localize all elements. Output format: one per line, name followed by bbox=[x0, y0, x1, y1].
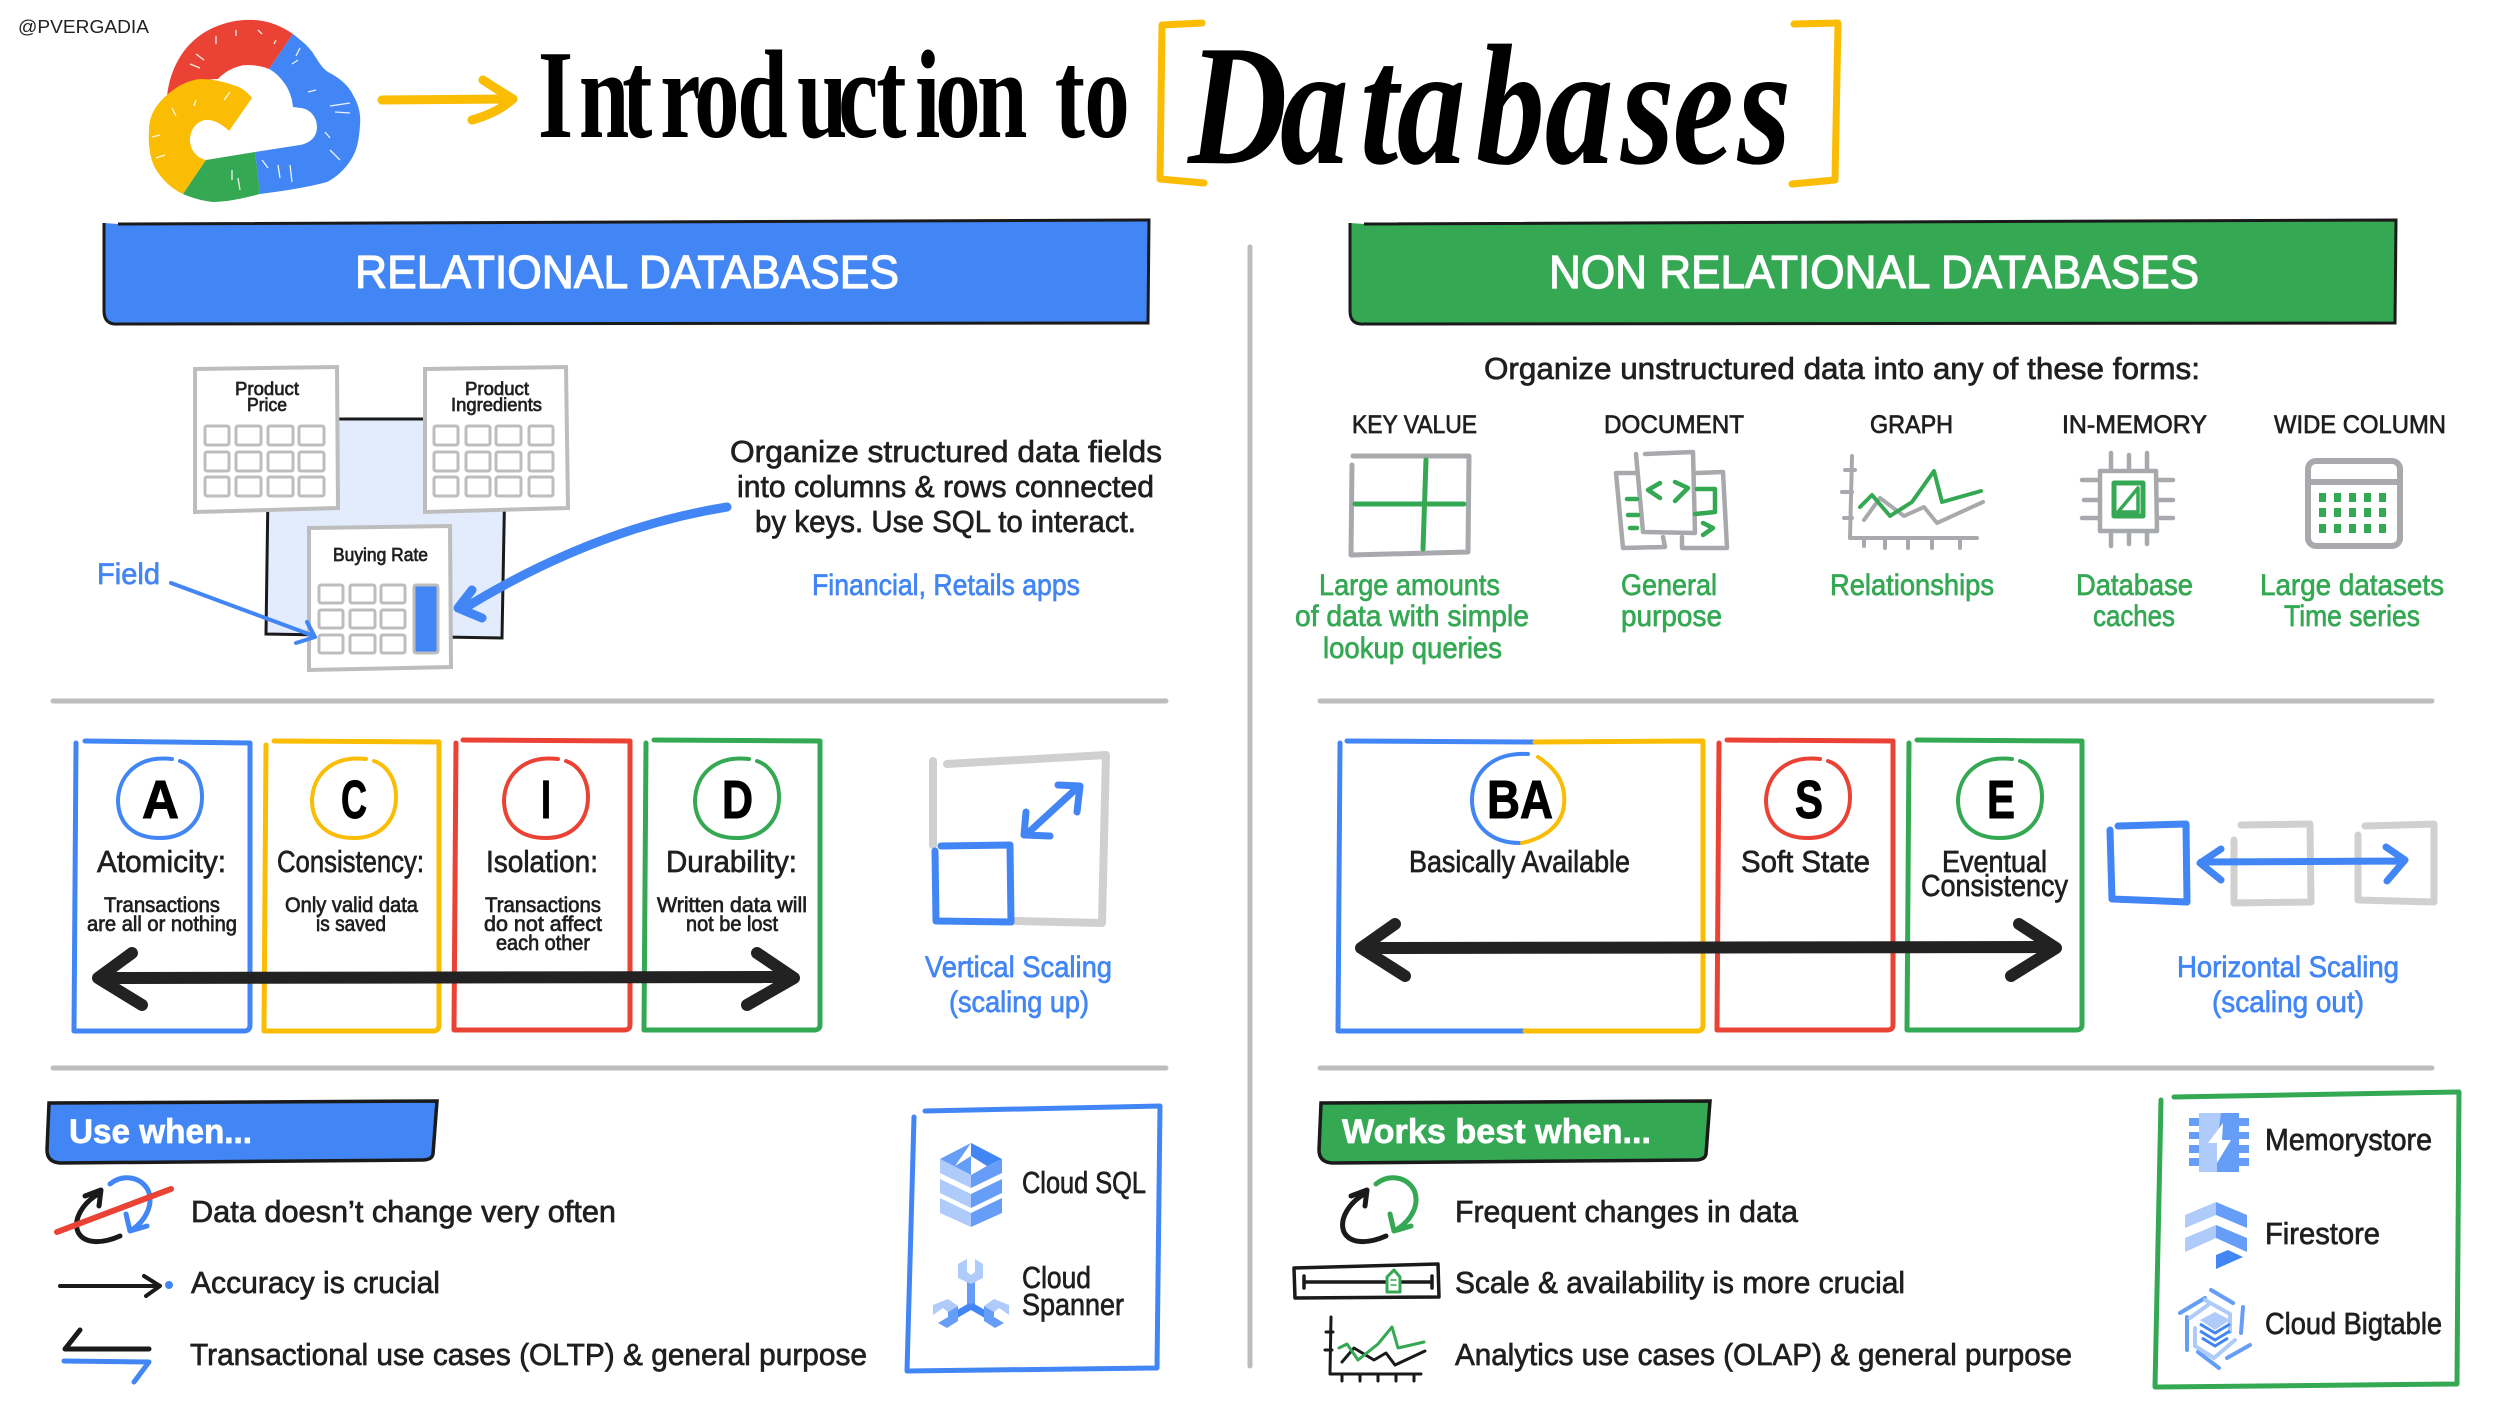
box: soft state: S bbox=[1795, 770, 1823, 830]
author handle: @PVERGADIA bbox=[18, 17, 149, 37]
arrow: logo to title bbox=[382, 80, 513, 120]
panel: relational header: RELATIONAL DATABASES bbox=[355, 246, 899, 298]
row: transactional: Transactional use cases (OLTP) & general purpose bbox=[190, 1337, 867, 1372]
panel: non relational header bbox=[1350, 220, 2396, 324]
column: wide column: Time series bbox=[2284, 600, 2420, 633]
icon: accuracy arrow bbox=[60, 1276, 172, 1296]
text: vertical scaling: (scaling up) bbox=[949, 986, 1089, 1019]
text: relational description bbox=[730, 434, 1162, 539]
box: atomicity: are all or nothing bbox=[87, 913, 237, 936]
icon: memorystore bbox=[2189, 1113, 2249, 1172]
diagram: relational tables bbox=[195, 367, 568, 670]
box: consistency: Consistency: bbox=[277, 844, 424, 879]
column: document: General bbox=[1621, 569, 1717, 602]
box: consistency bbox=[264, 741, 439, 1031]
column: key value: of data with simple bbox=[1295, 600, 1529, 633]
icon: cloud spanner bbox=[933, 1259, 1009, 1328]
box: basically available: BA bbox=[1487, 770, 1553, 830]
panel: cloud products non relational bbox=[2155, 1092, 2459, 1387]
column: key value bbox=[1295, 411, 1529, 665]
row: scale and availability: Scale & availability is more crucial bbox=[1455, 1265, 1905, 1300]
box: isolation: Transactions bbox=[485, 894, 601, 917]
box: atomicity: Atomicity: bbox=[97, 844, 226, 879]
box: isolation: I bbox=[541, 770, 551, 830]
box: consistency: C bbox=[341, 770, 367, 830]
row: frequent changes: Frequent changes in data bbox=[1455, 1194, 1799, 1229]
text: horizontal scaling: (scaling out) bbox=[2212, 986, 2364, 1019]
table card: product ingredients bbox=[425, 367, 568, 512]
row: scale and availability bbox=[1294, 1264, 1905, 1300]
row: frequent changes bbox=[1343, 1178, 1799, 1242]
column: wide column: WIDE COLUMN bbox=[2274, 411, 2446, 439]
column: graph: Relationships bbox=[1830, 569, 1994, 602]
bracket right bbox=[1792, 23, 1838, 184]
column: wide column bbox=[2260, 411, 2446, 633]
table card: product ingredients: Ingredients bbox=[451, 395, 542, 415]
box: atomicity bbox=[74, 741, 250, 1031]
arrow: BASE double arrow bbox=[1361, 924, 2056, 976]
text: vertical scaling bbox=[925, 951, 1112, 1019]
banner: use when: Use when... bbox=[69, 1113, 252, 1151]
box: consistency: is saved bbox=[316, 913, 386, 936]
icon: analytics graph bbox=[1325, 1317, 1425, 1381]
column: key value: Large amounts bbox=[1319, 569, 1500, 602]
row: data doesn't change bbox=[57, 1178, 616, 1242]
icon: firestore bbox=[2185, 1202, 2247, 1269]
panel: ACID bbox=[74, 740, 820, 1031]
panel: non relational header: NON RELATIONAL DATABASES bbox=[1549, 246, 2199, 298]
icon: crossed sync bbox=[57, 1178, 171, 1242]
banner: works best when: Works best when... bbox=[1342, 1113, 1651, 1151]
icon: cloud bigtable bbox=[2180, 1290, 2250, 1368]
table card: product price bbox=[195, 367, 338, 512]
box: durability: D bbox=[722, 770, 753, 830]
text: relational description: by keys. Use SQL to interact. bbox=[755, 504, 1136, 539]
title: Databases: Databases bbox=[1186, 10, 1791, 201]
panel: cloud products non relational: Memorystore bbox=[2265, 1122, 2432, 1157]
column: wide column: Large datasets bbox=[2260, 569, 2444, 602]
text: non relational intro: Organize unstructured data into any of these forms: bbox=[1484, 351, 2200, 386]
table card: product price: Product bbox=[235, 379, 299, 399]
row: analytics bbox=[1325, 1317, 2072, 1381]
panel: use when bbox=[47, 1101, 867, 1382]
box: eventual consistency: E bbox=[1987, 770, 2015, 830]
icon: slider bbox=[1294, 1264, 1439, 1298]
icon: vertical scaling bbox=[933, 755, 1106, 923]
box: isolation: Isolation: bbox=[486, 844, 598, 879]
text: horizontal scaling: Horizontal Scaling bbox=[2177, 951, 2399, 984]
box: eventual consistency: Consistency bbox=[1921, 868, 2068, 903]
label: field: Field bbox=[97, 558, 160, 591]
icon: horizontal scaling bbox=[2110, 824, 2434, 903]
column: key value: KEY VALUE bbox=[1352, 411, 1477, 439]
column: graph bbox=[1830, 411, 1994, 602]
column: graph: GRAPH bbox=[1870, 411, 1953, 439]
banner: use when bbox=[47, 1101, 437, 1163]
table card: buying rate: Buying Rate bbox=[333, 545, 428, 565]
box: durability: not be lost bbox=[686, 913, 778, 936]
icon: documents bbox=[1616, 452, 1727, 548]
box: basically available: Basically Available bbox=[1409, 844, 1630, 879]
icon: cloud sql bbox=[940, 1143, 1002, 1227]
row: analytics: Analytics use cases (OLAP) & general purpose bbox=[1455, 1337, 2072, 1372]
icon: sync bbox=[1343, 1178, 1416, 1242]
text: relational description: into columns & rows connected bbox=[737, 469, 1154, 504]
box: atomicity: Transactions bbox=[104, 894, 220, 917]
row: data doesn't change: Data doesn’t change very often bbox=[191, 1194, 616, 1229]
panel: relational header bbox=[104, 220, 1149, 324]
table card: product ingredients: Product bbox=[465, 379, 529, 399]
column: document bbox=[1604, 411, 1744, 633]
box: basically available bbox=[1338, 741, 1703, 1031]
icon: line graph bbox=[1842, 456, 1983, 548]
icon: wide column calendar bbox=[2308, 461, 2400, 546]
panel: cloud products relational: Cloud SQL bbox=[1022, 1165, 1146, 1200]
arrow: field pointer bbox=[171, 583, 315, 643]
panel: cloud products relational bbox=[907, 1106, 1160, 1371]
table link background bbox=[266, 419, 506, 638]
text: vertical scaling: Vertical Scaling bbox=[925, 951, 1112, 984]
table card: product price: Price bbox=[247, 395, 287, 415]
box: durability: Durability: bbox=[666, 844, 797, 879]
text: relational description: Organize structured data fields bbox=[730, 434, 1162, 469]
panel: cloud products relational: Cloud bbox=[1022, 1260, 1091, 1295]
column: in-memory bbox=[2062, 411, 2207, 633]
panel: BASE bbox=[1338, 740, 2082, 1031]
box: durability bbox=[644, 740, 820, 1030]
box: eventual consistency bbox=[1907, 740, 2082, 1030]
box: isolation: do not affect bbox=[484, 913, 602, 936]
panel: works best when bbox=[1294, 1101, 2072, 1381]
column: key value: lookup queries bbox=[1323, 632, 1502, 665]
box: soft state bbox=[1717, 740, 1893, 1030]
box: eventual consistency: Eventual bbox=[1942, 844, 2047, 879]
icon: transaction arrows bbox=[64, 1330, 149, 1382]
table card: buying rate bbox=[309, 526, 451, 670]
icon: memory chip bbox=[2082, 453, 2173, 546]
icon: Google Cloud logo bbox=[149, 20, 360, 202]
column: document: DOCUMENT bbox=[1604, 411, 1744, 439]
icon: key value table bbox=[1351, 456, 1469, 555]
panel: cloud products relational: Spanner bbox=[1022, 1287, 1124, 1322]
arrow: ACID double arrow bbox=[98, 953, 794, 1005]
box: atomicity: A bbox=[142, 770, 179, 830]
bracket left bbox=[1160, 23, 1204, 183]
panel: cloud products non relational: Firestore bbox=[2265, 1216, 2380, 1251]
box: consistency: Only valid data bbox=[285, 894, 418, 917]
column: in-memory: caches bbox=[2093, 600, 2175, 633]
box: isolation bbox=[454, 740, 630, 1030]
divider: centre bbox=[1248, 247, 1252, 1366]
banner: works best when bbox=[1319, 1101, 1710, 1163]
arrow: structure callout bbox=[458, 507, 727, 618]
column: in-memory: Database bbox=[2076, 569, 2193, 602]
column: in-memory: IN-MEMORY bbox=[2062, 411, 2207, 439]
row: accuracy bbox=[60, 1265, 440, 1300]
box: durability: Written data will bbox=[657, 894, 807, 917]
box: soft state: Soft State bbox=[1741, 844, 1870, 879]
column: document: purpose bbox=[1621, 600, 1722, 633]
box: isolation: each other bbox=[496, 932, 590, 955]
panel: cloud products non relational: Cloud Bigtable bbox=[2265, 1306, 2442, 1341]
row: transactional bbox=[64, 1330, 867, 1382]
text: relational apps: Financial, Retails apps bbox=[812, 569, 1080, 602]
title: Introduction to: Introduction to bbox=[538, 25, 1130, 165]
row: accuracy: Accuracy is crucial bbox=[191, 1265, 440, 1300]
text: horizontal scaling bbox=[2177, 951, 2399, 1019]
